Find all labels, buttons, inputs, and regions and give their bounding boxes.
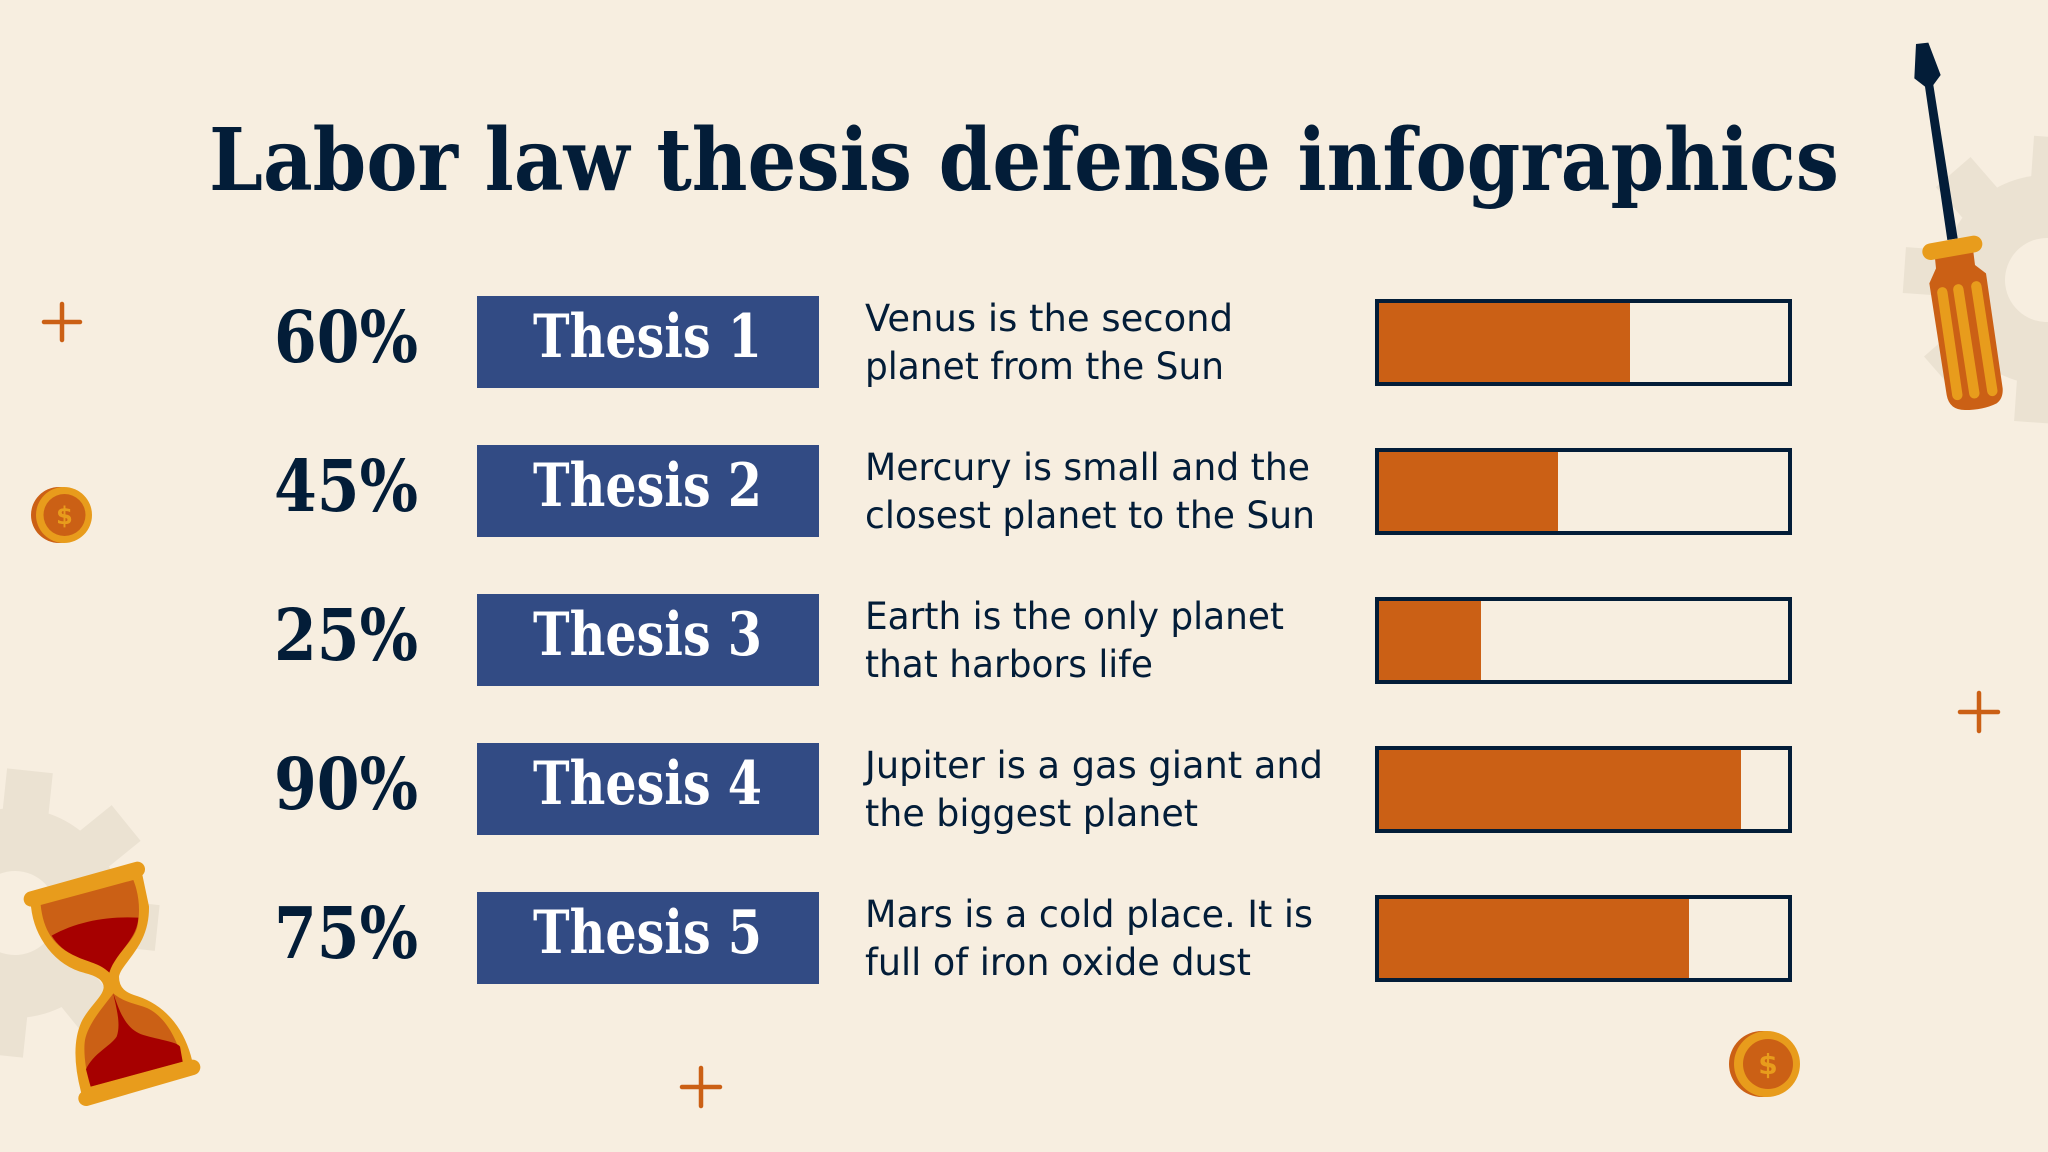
description 1: Venus is the second xyxy=(865,297,1233,340)
badge Thesis 2: Thesis 2 xyxy=(533,451,762,521)
description 5: full of iron oxide dust xyxy=(865,941,1251,984)
title: Labor law thesis defense infographics xyxy=(209,110,1839,211)
description 2: Mercury is small and the xyxy=(865,446,1310,489)
description 4: Jupiter is a gas giant and xyxy=(863,744,1323,787)
gear background: top right xyxy=(1894,127,2048,433)
percentage 75%: 75% xyxy=(274,891,418,975)
row 5: Thesis 5 xyxy=(274,891,1790,984)
row 4: Thesis 4 xyxy=(274,742,1790,835)
description 1: planet from the Sun xyxy=(865,345,1224,388)
description 3: Earth is the only planet xyxy=(865,595,1284,638)
progress bar 45% xyxy=(1377,450,1790,533)
progress bar 75% xyxy=(1377,897,1790,980)
icon: hourglass xyxy=(31,869,193,1098)
icon: plus left xyxy=(44,304,80,340)
icon: coin right xyxy=(1729,1031,1800,1097)
badge Thesis 4 xyxy=(477,743,819,835)
icon: coin left: $ xyxy=(56,502,73,530)
badge Thesis 2 xyxy=(477,445,819,537)
percentage 45%: 45% xyxy=(274,444,418,528)
badge Thesis 1: Thesis 1 xyxy=(533,302,762,372)
icon: coin right: $ xyxy=(1758,1048,1778,1081)
badge Thesis 5: Thesis 5 xyxy=(533,898,762,968)
progress bar 60% xyxy=(1377,301,1790,384)
description 2: closest planet to the Sun xyxy=(865,494,1315,537)
icon: plus bottom xyxy=(682,1068,720,1106)
row 1: Thesis 1 xyxy=(274,295,1790,388)
row 2: Thesis 2 xyxy=(274,444,1790,537)
description 3: that harbors life xyxy=(865,643,1153,686)
percentage 60%: 60% xyxy=(274,295,418,379)
icon: plus right xyxy=(1960,693,1998,731)
icon: screwdriver xyxy=(1914,43,2003,410)
badge Thesis 1 xyxy=(477,296,819,388)
gear background: bottom left xyxy=(0,756,172,1070)
percentage 25%: 25% xyxy=(274,593,418,677)
badge Thesis 4: Thesis 4 xyxy=(533,749,762,819)
badge Thesis 3: Thesis 3 xyxy=(533,600,762,670)
row 3: Thesis 3 xyxy=(274,593,1790,686)
description 5: Mars is a cold place. It is xyxy=(865,893,1313,936)
description 4: the biggest planet xyxy=(865,792,1198,835)
progress bar 90% xyxy=(1377,748,1790,831)
icon: coin left xyxy=(31,487,92,543)
badge Thesis 3 xyxy=(477,594,819,686)
percentage 90%: 90% xyxy=(274,742,418,826)
badge Thesis 5 xyxy=(477,892,819,984)
progress bar 25% xyxy=(1377,599,1790,682)
